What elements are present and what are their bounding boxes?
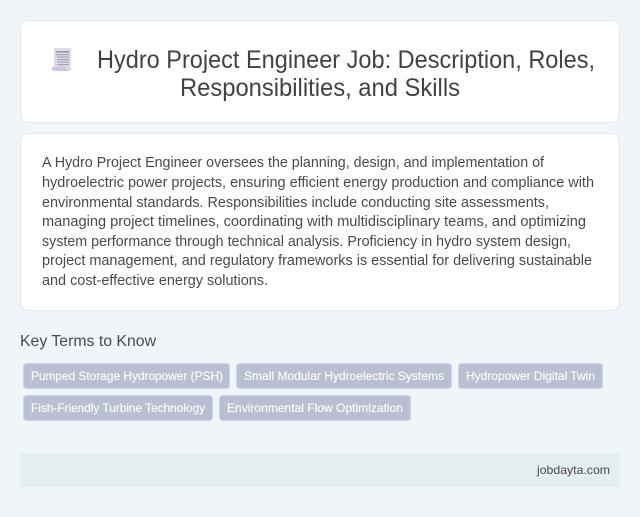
tag: fish-friendly: Fish-Friendly Turbine Technology — [31, 401, 205, 415]
heading: Responsibilities, and Skills — [180, 74, 460, 102]
description text: system performance through technical analysis. Proficiency in hydro system design, — [42, 234, 571, 250]
icon: document scroll — [52, 48, 71, 71]
heading — [97, 46, 595, 102]
description text — [42, 155, 594, 289]
tag: environmental flow — [220, 396, 410, 420]
description text: A Hydro Project Engineer oversees the planning, design, and implementation of — [42, 155, 545, 171]
description text: and cost-effective energy solutions. — [42, 273, 268, 289]
description text: managing project timelines, coordinating with multidisciplinary teams, and optimizing — [42, 214, 586, 230]
heading: key terms: Key Terms to Know — [20, 333, 156, 350]
footer source text: jobdayta.com — [536, 463, 610, 477]
description text: environmental standards. Responsibilities include conducting site assessments, — [42, 195, 549, 211]
tag: digital twin — [458, 364, 602, 388]
description text: project management, and regulatory frameworks is essential for delivering sustainable — [42, 253, 592, 269]
tag: environmental flow: Environmental Flow Optimization — [227, 401, 403, 415]
tag: pumped storage: Pumped Storage Hydropower (PSH) — [31, 369, 223, 383]
tag: small modular: Small Modular Hydroelectric Systems — [244, 369, 444, 383]
tag: pumped storage — [24, 364, 230, 388]
tag: digital twin: Hydropower Digital Twin — [466, 369, 595, 383]
panel: title card — [20, 20, 620, 122]
heading: Hydro Project Engineer Job: Description, Roles, — [97, 46, 595, 74]
tags: key terms — [24, 364, 602, 420]
tag: small modular — [236, 364, 452, 388]
description text: hydroelectric power projects, ensuring efficient energy production and compliance with — [42, 175, 594, 191]
panel: description card — [20, 134, 620, 310]
footer bar — [20, 453, 620, 487]
tag: fish-friendly — [24, 396, 212, 420]
